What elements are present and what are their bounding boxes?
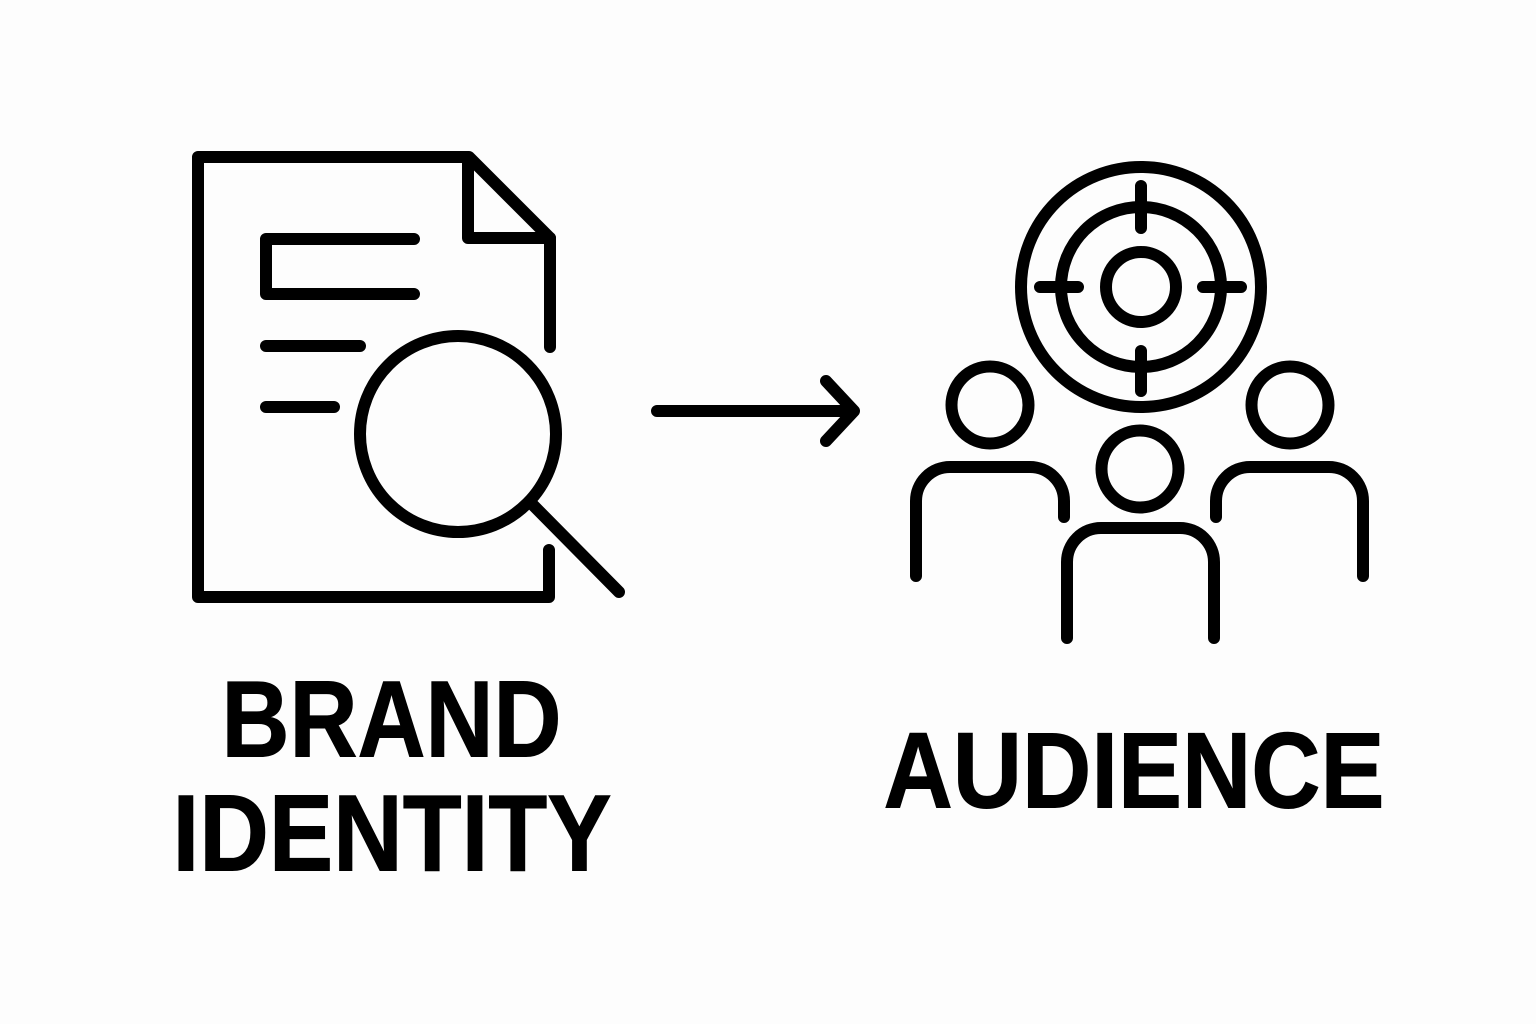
heading: brand identity (172, 658, 612, 894)
heading: audience: AUDIENCE (884, 710, 1384, 830)
document folded corner (468, 158, 550, 238)
icon: target above audience (1021, 167, 1261, 407)
person centre (1067, 430, 1214, 638)
person left (916, 366, 1064, 576)
heading: brand identity: IDENTITY (172, 772, 612, 894)
target crosshair ticks (1040, 186, 1241, 391)
icon: document with magnifying glass (198, 157, 619, 597)
icon: audience people (916, 366, 1363, 638)
person right (1216, 366, 1363, 576)
target inner ring (1106, 252, 1176, 322)
target middle ring (1061, 207, 1221, 367)
magnifying glass handle (532, 504, 619, 592)
magnifying glass lens (360, 336, 556, 532)
heading: brand identity: BRAND (222, 658, 562, 780)
arrow (657, 381, 854, 441)
document outline (198, 157, 550, 597)
headline box (266, 239, 414, 294)
text line two (266, 401, 334, 413)
target outer ring (1021, 167, 1261, 407)
text line one (266, 340, 360, 352)
